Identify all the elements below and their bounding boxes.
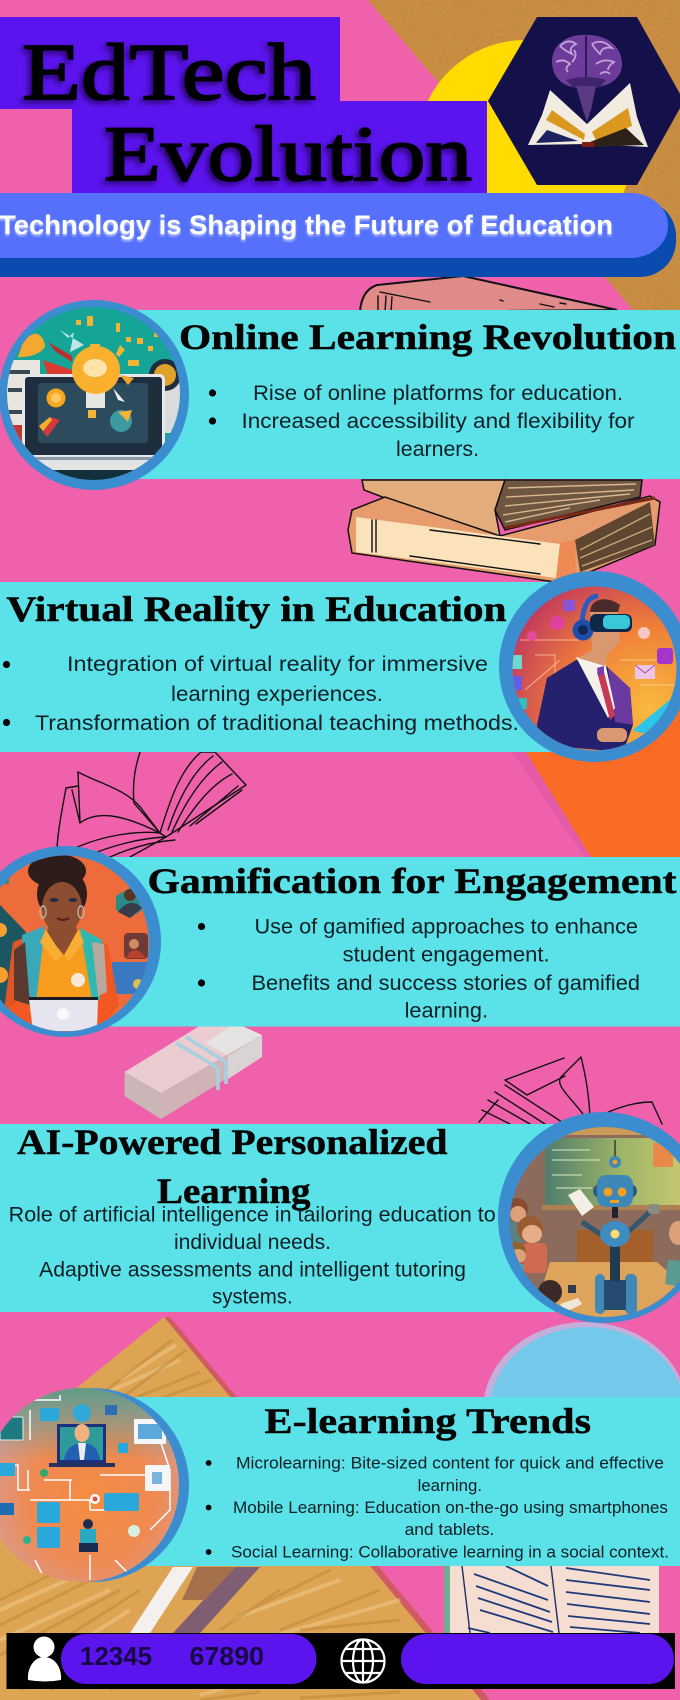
phone pill [61, 1634, 316, 1684]
body text: Adaptive assessments and intelligent tutoring [39, 1258, 466, 1282]
panel: online learning revolution [0, 300, 680, 494]
body text: individual needs. [174, 1231, 331, 1254]
panel: e-learning trends [0, 1385, 680, 1585]
image: robot teacher in classroom [498, 1112, 680, 1325]
bullet list: Integration of virtual reality for immersive [67, 653, 488, 676]
illustration: ruler on board [130, 1567, 193, 1633]
illustration: second sketched book [479, 1057, 662, 1124]
phone number: 12345 [80, 1641, 152, 1671]
panel: ai-powered personalized learning [0, 1112, 680, 1325]
illustration: sketched pink book [360, 276, 617, 312]
title: EdTech: EdTech [22, 29, 316, 117]
bullet list [206, 1454, 669, 1562]
bullet list: Use of gamified approaches to enhance [254, 916, 638, 938]
bullet list [3, 653, 519, 735]
illustration: pencil band on board [173, 1567, 260, 1633]
title band: upper purple [0, 17, 340, 109]
icon: globe [342, 1640, 384, 1682]
image: laptop and light bulb [0, 300, 190, 494]
illustration: yellow circle [417, 40, 633, 256]
bullet list: Transformation of traditional teaching methods. [35, 712, 519, 735]
footer bar [6, 1633, 675, 1689]
bullet list: Rise of online platforms for education. [253, 382, 623, 405]
bullet list: and tablets. [405, 1520, 494, 1539]
subtitle ribbon [0, 193, 676, 277]
bullet list [209, 382, 635, 461]
illustration: wooden board [0, 1317, 490, 1700]
illustration: stacked vintage books [348, 480, 660, 582]
heading: Gamification for Engagement [148, 861, 677, 901]
subtitle text: Technology is Shaping the Future of Education [0, 210, 613, 240]
background: cork board [368, 0, 680, 365]
website pill [401, 1634, 674, 1684]
title: Evolution: Evolution [104, 110, 472, 197]
bullet list: learning experiences. [171, 683, 383, 706]
image: man with VR headset [499, 571, 680, 762]
illustration: eraser [124, 1025, 262, 1119]
heading: Online Learning Revolution [179, 317, 676, 357]
icon: purple brain [552, 35, 622, 122]
body text: systems. [212, 1285, 293, 1308]
icon: open book [528, 83, 648, 147]
body text: Role of artificial intelligence in tailoring education to [9, 1204, 496, 1227]
bullet list: learning. [418, 1476, 482, 1495]
illustration: blue plate [483, 1322, 680, 1498]
bullet list: Benefits and success stories of gamified [252, 972, 640, 995]
panel: virtual reality in education [0, 571, 680, 762]
icon: person [28, 1636, 61, 1682]
bullet list: Social Learning: Collaborative learning in a social context. [231, 1543, 669, 1562]
heading second line: Learning [157, 1171, 310, 1211]
bullet list: Microlearning: Bite-sized content for quick and effective [236, 1454, 664, 1473]
heading: Virtual Reality in Education [6, 589, 506, 629]
body text [9, 1204, 496, 1308]
bullet list: student engagement. [343, 944, 550, 966]
image: network of online learning [0, 1385, 190, 1585]
bullet list: learners. [396, 438, 479, 461]
heading: AI-Powered Personalized [17, 1122, 448, 1162]
logo hexagon with brain and book [488, 17, 680, 185]
illustration: orange notebook [512, 705, 680, 857]
title band: lower purple [72, 101, 487, 193]
bullet list: learning. [405, 1000, 488, 1023]
heading: E-learning Trends [264, 1401, 591, 1441]
phone number second part: 67890 [190, 1641, 264, 1671]
title block [0, 17, 487, 197]
illustration: sketched open book [57, 752, 246, 857]
bullet list: Increased accessibility and flexibility for [242, 410, 635, 433]
illustration: lined open notebook [444, 1560, 659, 1635]
image: student with tablet [0, 846, 161, 1040]
panel: gamification for engagement [0, 846, 680, 1040]
bullet list: Mobile Learning: Education on-the-go using smartphones [233, 1498, 668, 1517]
bullet list [198, 916, 640, 1023]
